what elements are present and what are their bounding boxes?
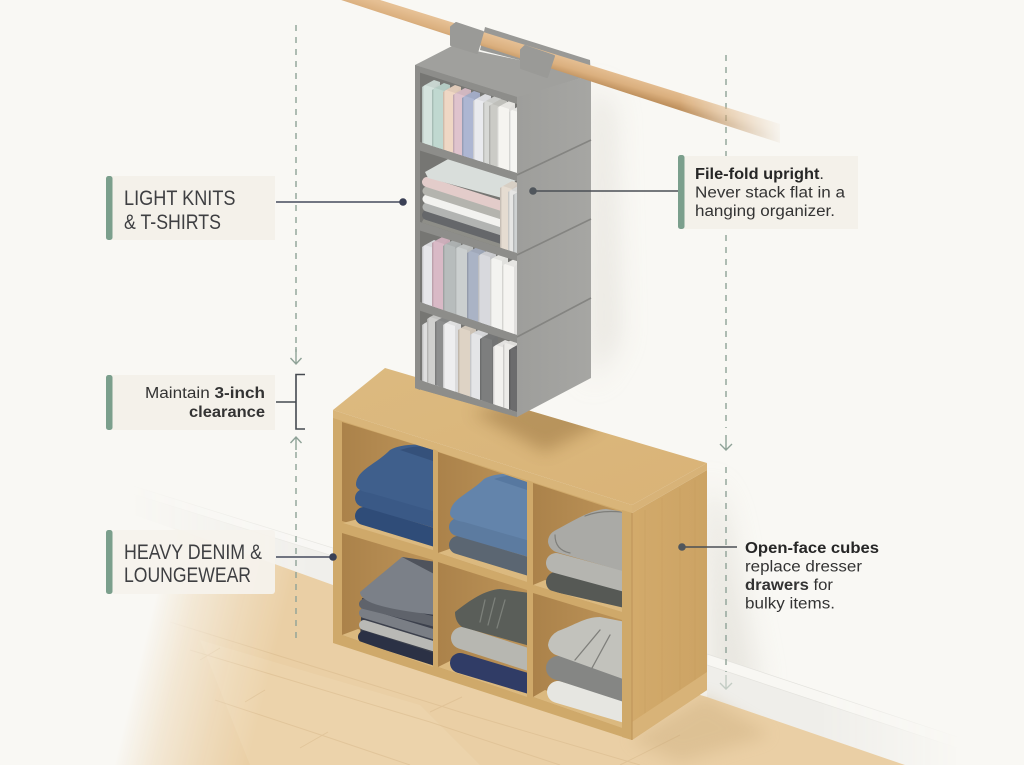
shorts bottom left [360, 557, 436, 664]
front posts [433, 449, 632, 740]
lower left dashed guide [295, 452, 297, 642]
baseboard right [707, 654, 907, 743]
arrow down to clearance [290, 347, 302, 364]
file-fold accent bar [678, 155, 684, 229]
leader: light knits [276, 198, 407, 206]
organizer side seams [517, 140, 591, 337]
label: heavy denim [106, 530, 275, 594]
shelf side panel [632, 470, 707, 740]
clearance text [145, 385, 265, 421]
clearance guide lines [290, 25, 732, 689]
organizer strap right [521, 46, 554, 77]
label: clearance [106, 375, 275, 430]
arrow up from clearance [290, 437, 302, 450]
organizer shelves and edges [415, 65, 517, 417]
folded stack row 2 [422, 159, 517, 253]
organizer side [517, 75, 591, 417]
heavy denim panel [112, 530, 275, 594]
label text [124, 187, 236, 234]
leader: heavy denim [276, 553, 337, 561]
lower right dashed guide [725, 467, 727, 672]
heavy denim text: HEAVY DENIM & [124, 541, 262, 564]
cube shelf [333, 368, 707, 740]
clearance accent bar [106, 375, 112, 430]
shirts row 4 [422, 315, 517, 412]
shelf surfaces [342, 519, 622, 728]
label text: & T-SHIRTS [124, 211, 221, 234]
heavy denim accent bar [106, 530, 112, 594]
leader: file-fold [529, 187, 678, 195]
clearance text: Maintain 3-inch [145, 385, 265, 402]
hoodies bottom right [548, 617, 626, 712]
organizer strap left [451, 23, 483, 53]
organizer shadow on shelf [477, 407, 596, 455]
clearance bracket [276, 374, 305, 429]
cube compartments [342, 422, 622, 728]
file-fold text: Never stack flat in a [695, 184, 845, 202]
jeans top middle [450, 474, 530, 567]
file-fold panel [684, 156, 858, 229]
organizer front body [415, 65, 517, 417]
heavy denim text: LOUNGEWEAR [124, 564, 251, 587]
text: open-face cubes: replace dresser [745, 558, 862, 576]
shirts row 3 [422, 236, 520, 338]
text: open-face cubes [745, 540, 879, 612]
side wood grain [645, 480, 695, 728]
green accent bar [106, 176, 112, 240]
text: open-face cubes: drawers for [745, 577, 833, 594]
text: open-face cubes: bulky items. [745, 596, 835, 612]
compartment interiors [420, 71, 517, 412]
file-fold text: File-fold upright . [695, 166, 824, 183]
wall shadows [591, 85, 760, 690]
wood floor [124, 564, 905, 765]
baseboard left [214, 511, 333, 584]
clearance panel [112, 375, 275, 430]
shelf top [333, 368, 707, 505]
organizer top [415, 46, 591, 98]
front post edge [631, 513, 633, 740]
right dashed guide [725, 55, 727, 428]
shelf front frame [333, 416, 632, 740]
hoodies bottom middle [455, 589, 530, 684]
back panel [480, 27, 591, 78]
clearance text: clearance [189, 404, 265, 421]
label: file-fold [678, 155, 858, 229]
shelf top front edge [333, 410, 632, 514]
shirts row 1 [422, 80, 517, 173]
file-fold text: hanging organizer. [695, 203, 835, 220]
heavy denim text [124, 541, 262, 587]
leader: open-face [678, 543, 737, 551]
faded arrow bottom right [720, 675, 732, 689]
shadow below cube shelf [630, 695, 770, 762]
jeans top left [356, 445, 436, 538]
closet rod [335, 0, 780, 143]
label text: LIGHT KNITS [124, 187, 236, 210]
label panel [112, 176, 275, 240]
sweats top right [548, 509, 626, 598]
file-fold text [695, 166, 845, 220]
upper left dashed guide [295, 25, 297, 352]
shelf side trim [632, 463, 707, 740]
label: light knits [106, 176, 275, 240]
text: open-face cubes: Open-face cubes [745, 540, 879, 557]
right arrow down [720, 435, 732, 450]
hanging organizer [415, 27, 591, 422]
